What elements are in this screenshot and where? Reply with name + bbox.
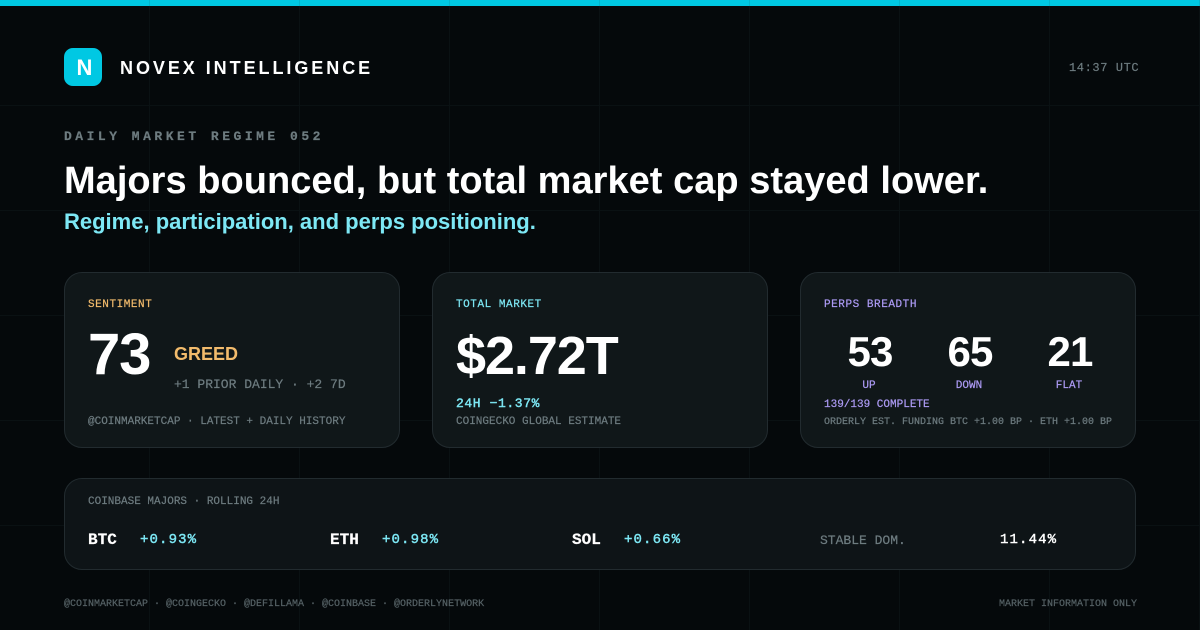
timestamp: 14:37 UTC (1069, 61, 1139, 75)
BTC: +0.93% (140, 532, 197, 548)
panel label: TOTAL MARKET (456, 299, 542, 311)
sentiment change: +1 PRIOR DAILY · +2 7D (174, 377, 346, 392)
up count: UP (862, 380, 876, 392)
ETH (330, 531, 439, 549)
brand header (64, 48, 373, 86)
panel: total market (432, 272, 768, 448)
panel label: PERPS BREADTH (824, 299, 917, 311)
panel: perps breadth (800, 272, 1136, 448)
market source: COINGECKO GLOBAL ESTIMATE (456, 416, 621, 428)
ETH: ETH (330, 531, 359, 549)
funding note: ORDERLY EST. FUNDING BTC +1.00 BP · ETH +1.00 BP (824, 417, 1112, 428)
BTC: BTC (88, 531, 117, 549)
panel: sentiment (64, 272, 400, 448)
BTC (88, 531, 197, 549)
panel: coinbase majors (64, 478, 1136, 570)
up count: 53 (847, 328, 893, 375)
down count: DOWN (956, 380, 982, 392)
sentiment state: GREED (174, 344, 238, 364)
icon: N logo: N (77, 55, 92, 80)
stable dominance: 11.44% (1000, 532, 1057, 548)
SOL: SOL (572, 531, 601, 549)
stable dominance: STABLE DOM. (820, 533, 906, 548)
footer sources: @COINMARKETCAP · @COINGECKO · @DEFILLAMA · @COINBASE · @ORDERLYNETWORK (64, 599, 484, 610)
stable dominance (820, 532, 1057, 548)
eyebrow: DAILY MARKET REGIME 052 (64, 128, 324, 144)
ETH: +0.98% (382, 532, 439, 548)
SOL (572, 531, 681, 549)
sentiment score: 73 (88, 322, 150, 387)
title: Majors bounced, but total market cap stayed lower. (64, 160, 988, 202)
24h change: 24H −1.37% (456, 396, 540, 411)
sentiment source: @COINMARKETCAP · LATEST + DAILY HISTORY (88, 416, 345, 428)
brand name: NOVEX INTELLIGENCE (120, 58, 373, 78)
subtitle: Regime, participation, and perps positioning. (64, 209, 536, 234)
top accent bar (0, 0, 1200, 6)
SOL: +0.66% (624, 532, 681, 548)
panel label: SENTIMENT (88, 299, 152, 311)
icon: N logo (64, 48, 102, 86)
footer disclaimer: MARKET INFORMATION ONLY (999, 599, 1137, 610)
down count: 65 (947, 328, 993, 375)
panel label: COINBASE MAJORS · ROLLING 24H (88, 496, 279, 508)
flat count: 21 (1047, 328, 1093, 375)
flat count: FLAT (1056, 380, 1082, 392)
market cap value: $2.72T (456, 326, 618, 386)
completion: 139/139 COMPLETE (824, 399, 930, 411)
